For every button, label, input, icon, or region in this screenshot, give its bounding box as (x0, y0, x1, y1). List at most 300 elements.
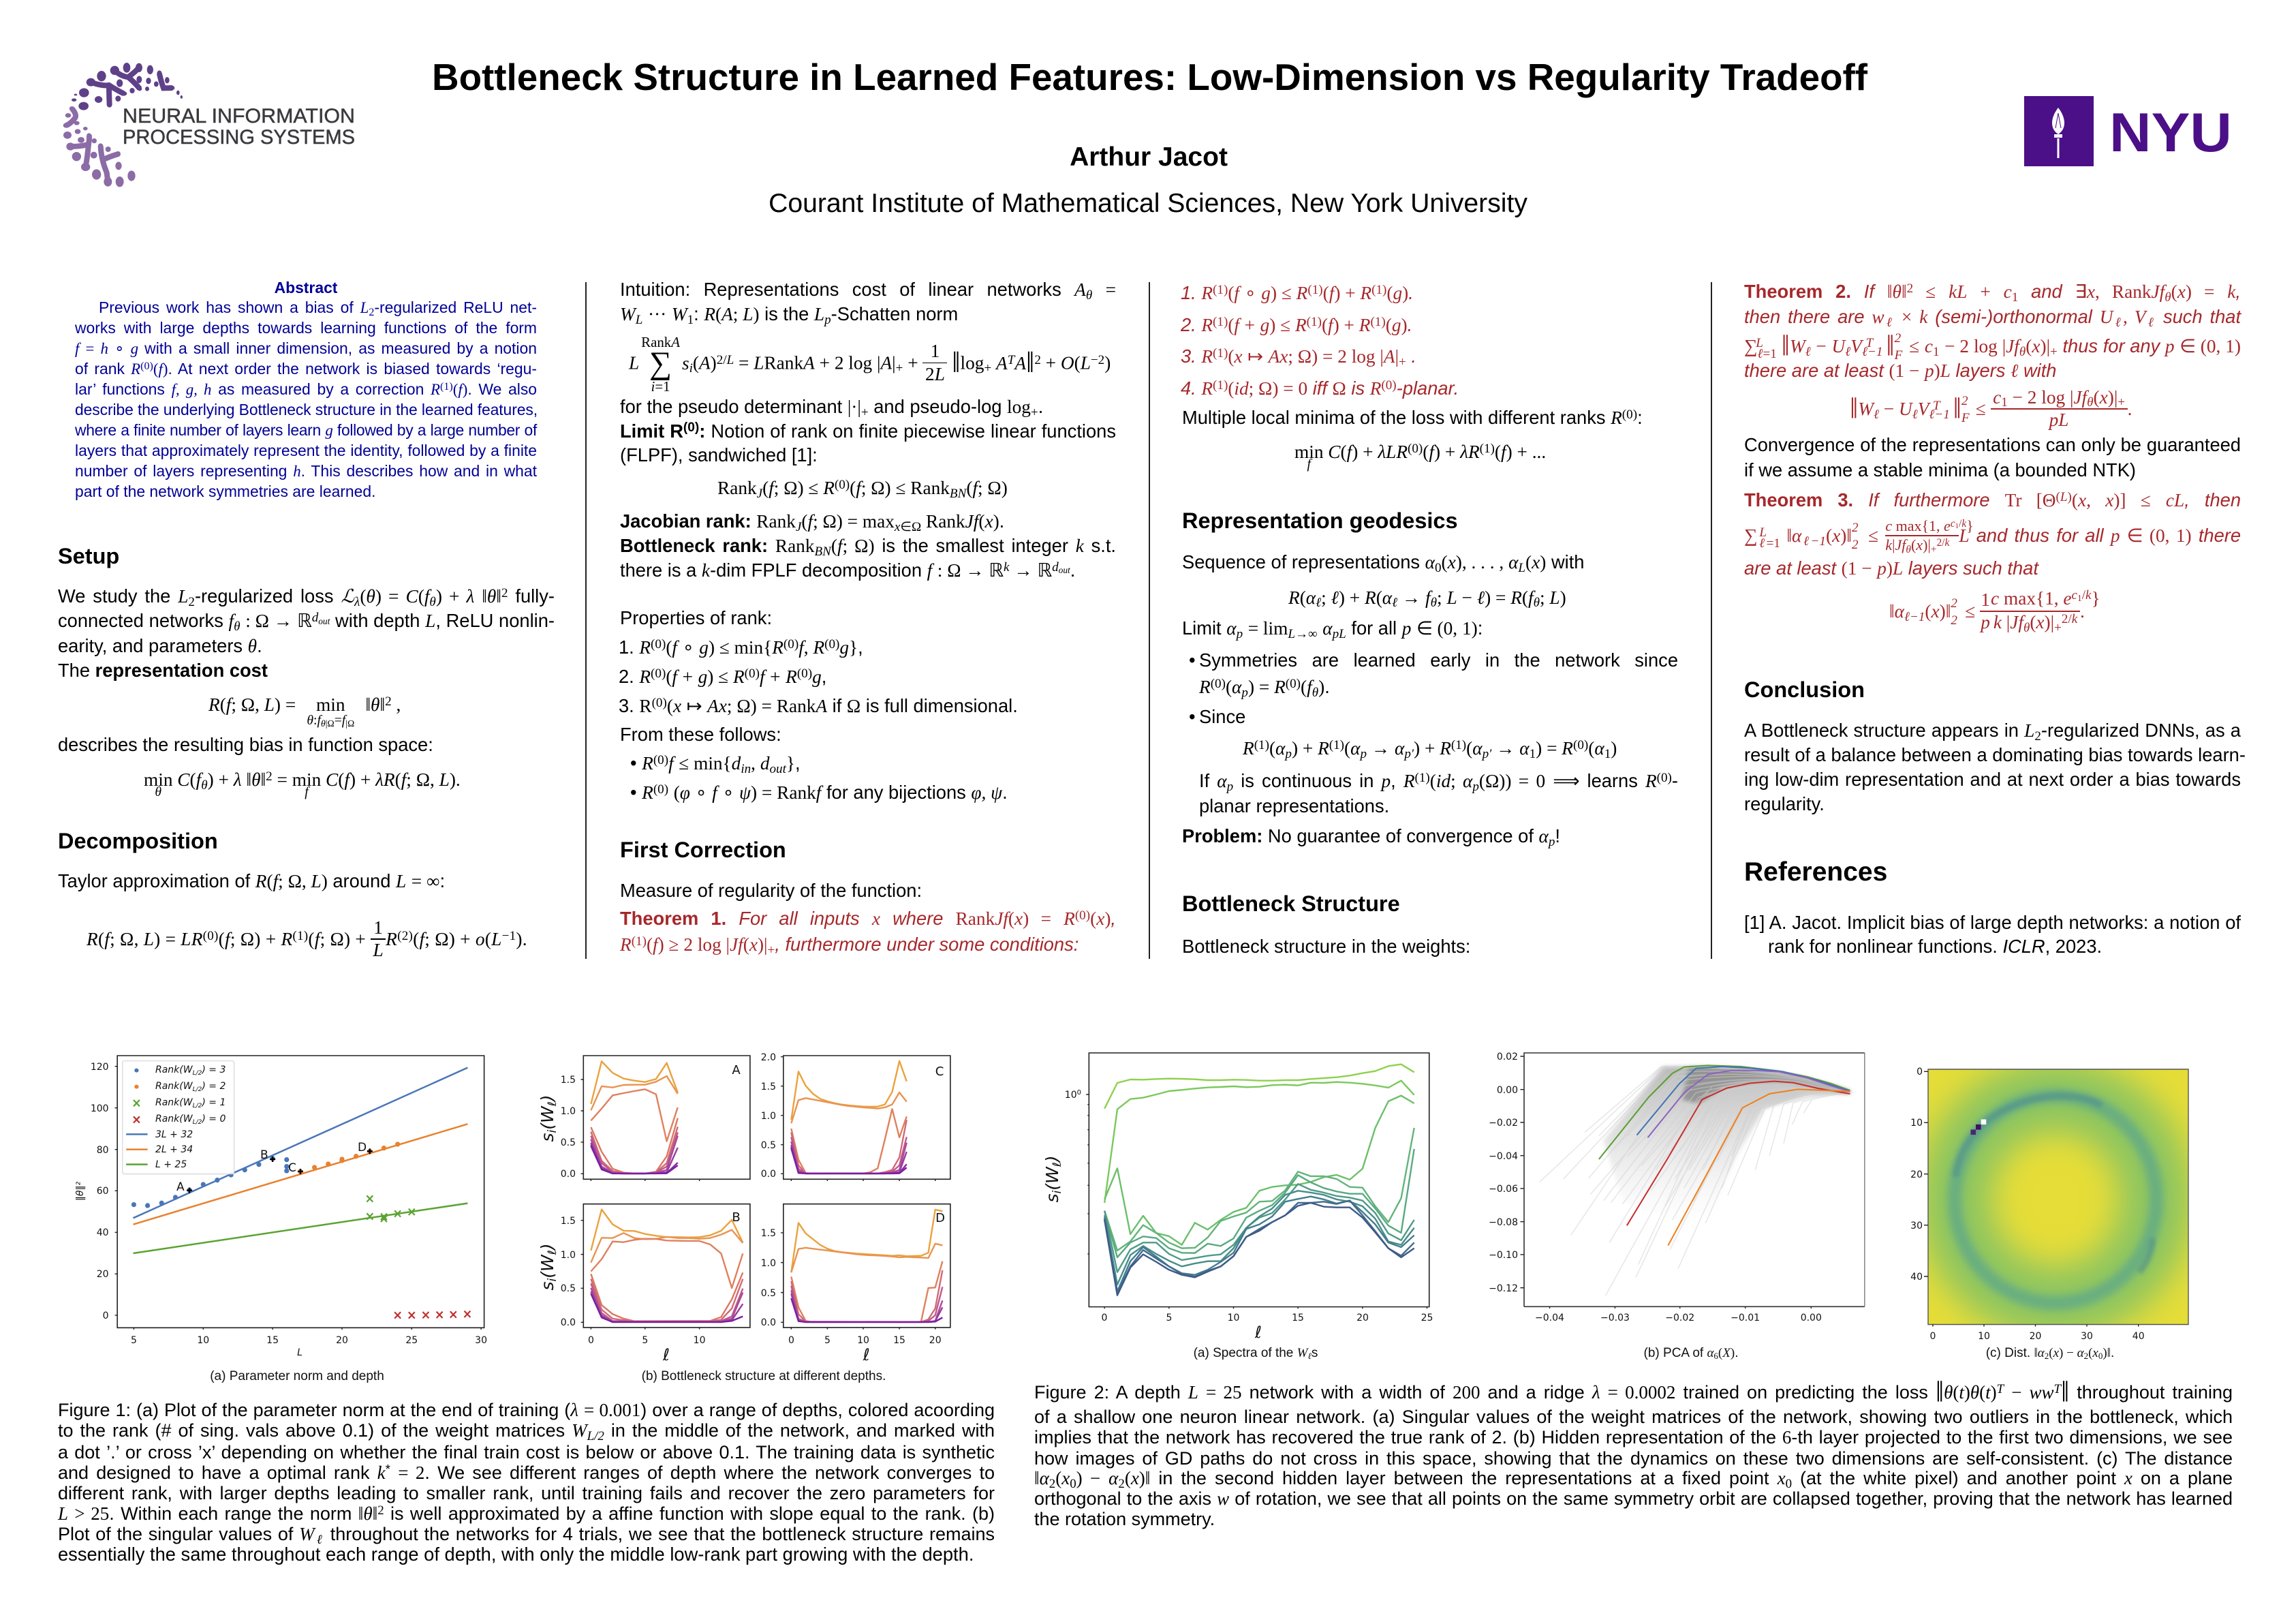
equation: geodesic: R(αℓ; ℓ) + R(αℓ → fθ; L − ℓ) = R(fθ; L) (1288, 587, 1566, 610)
chart: parameter norm vs depth: 10 (197, 1335, 209, 1346)
chart: parameter norm vs depth: (a) Parameter norm and depth (210, 1369, 384, 1383)
chart: bottleneck structure, panels A B C D: 15 (893, 1335, 905, 1346)
chart: parameter norm vs depth: 2L + 34 (155, 1144, 193, 1155)
caption: figure 2: Figure 2: A depth L = 25 network with a width of 200 and a ridge λ = 0.0002 trained on predicting the loss ‖θ(t)θ(t)T − wwT‖ throughout training (1034, 1376, 2233, 1408)
chart: PCA of hidden representation: (b) PCA of α (1644, 1346, 1713, 1360)
chart: spectra of the weight matrices: 20 (1356, 1313, 1369, 1323)
chart: parameter norm vs depth: D (358, 1141, 367, 1154)
chart: parameter norm vs depth: 20 (336, 1335, 348, 1346)
equation: function space bias: f (305, 784, 309, 799)
equation: function space bias: C(fθ) + λ ‖θ‖2 = C(f) + λR(f; Ω, L). (177, 769, 461, 793)
text: setup: We study the L2-regularized loss ℒλ(θ) = C(fθ) + λ ‖θ‖2 fully- (58, 585, 555, 609)
text: intuition: WL ··· W1: R(A; L) is the Lp-Schatten norm (620, 303, 958, 327)
equation: objective expansion: min (1294, 442, 1323, 462)
text: limit: Limit αp = limL→∞ αpL for all p ∈ (0, 1): (1182, 617, 1483, 641)
text: rank definitions (620, 510, 1116, 581)
abstract (75, 279, 538, 500)
caption: figure 2: implies that the network has recovered the true rank of 2. (b) Hidden representation of the 6-th layer projected to the first two dimensions, we see (1034, 1427, 2233, 1447)
text: continuity (1199, 769, 1678, 819)
chart: spectra of the weight matrices: 10 (1065, 1090, 1077, 1101)
text: conclusion: ing low-dim representation and at next order a bias towards (1744, 769, 2241, 790)
chart: bottleneck structure, panels A B C D: 1.0 (561, 1250, 576, 1261)
chart: distance heatmap: . (2111, 1346, 2114, 1360)
list: rank properties: 3. R(0)(x ↦ Ax; Ω) = RankA if Ω is full dimensional. (619, 695, 1018, 716)
panel: column 3 (1180, 282, 1678, 957)
chart: parameter norm vs depth: C (288, 1161, 296, 1175)
theorem 2: there are at least (1 − p)L layers ℓ with (1744, 360, 2056, 381)
panel: column 4 (1744, 271, 2241, 961)
text: problem: Problem: No guarantee of convergence of αp! (1182, 825, 1560, 849)
chart: distance heatmap: 30 (2081, 1331, 2093, 1342)
logo: NeurIPS: NEURAL INFORMATION (123, 105, 355, 127)
text: limit R0 (620, 396, 1116, 465)
caption: figure 1: essentially the same throughout each range of depth, with only the middle low-rank part growing with the depth. (58, 1544, 974, 1565)
chart: bottleneck structure, panels A B C D: 0.5 (561, 1137, 576, 1148)
divider lines between columns (0, 0, 2296, 1022)
chart: parameter norm vs depth (75, 1056, 487, 1383)
theorem 1 conditions: 1. R(1)(f ∘ g) ≤ R(1)(f) + R(1)(g). (1181, 282, 1414, 303)
title: Bottleneck Structure in Learned Features: Low-Dimension vs Regularity Tradeoff (432, 56, 1867, 98)
equation: representation cost: R(f; Ω, L) = ‖θ‖2 , (208, 694, 401, 715)
chart: spectra of the weight matrices: (W (1042, 1166, 1062, 1191)
chart: parameter norm vs depth: L/2 (193, 1103, 202, 1109)
theorem 3: 2 (1852, 521, 1859, 535)
chart: parameter norm vs depth: ) = 2 (201, 1081, 226, 1092)
heading: Conclusion: Conclusion (1744, 677, 1865, 702)
theorem 2 (1744, 279, 2241, 384)
chart: spectra of the weight matrices: ℓ (1307, 1351, 1312, 1361)
text: sequence of representations: Sequence of representations α0(x), . . . , αL(x) with (1182, 551, 1585, 575)
chart: PCA of hidden representation: 6 (1713, 1351, 1718, 1361)
chart: bottleneck structure, panels A B C D: 0.0 (761, 1317, 776, 1328)
chart: PCA of hidden representation: −0.03 (1600, 1313, 1630, 1323)
chart: bottleneck structure, panels A B C D: D (935, 1211, 945, 1225)
chart: spectra of the weight matrices: ℓ (1051, 1162, 1064, 1167)
chart: bottleneck structure, panels A B C D: 10 (857, 1335, 869, 1346)
text: setup: earity, and parameters θ. (58, 635, 262, 656)
panel B (591, 1210, 743, 1322)
chart: bottleneck structure, panels A B C D: 0.5 (561, 1283, 576, 1294)
chart: parameter norm vs depth: 20 (97, 1269, 109, 1280)
theorem 3: Theorem 3. If furthermore Tr [Θ(L)(x, x)] ≤ cL, then (1744, 489, 2241, 510)
chart: PCA of hidden representation: ( (1718, 1346, 1722, 1360)
chart: bottleneck structure, panels A B C D: 1.0 (761, 1258, 776, 1269)
theorem 3: ∑ℓ=1L ‖αℓ−1(x)‖ ≤ L and thus for all p ∈ (0, 1) there (1744, 525, 2241, 551)
equation: objective expansion: f (1307, 457, 1311, 472)
chart: PCA of hidden representation: −0.06 (1489, 1184, 1518, 1195)
text: intuition (620, 279, 1116, 327)
list: symmetries bullet: R(0)(αp) = R(0)(fθ). (1199, 676, 1330, 700)
list: since bullet: Since (1199, 706, 1245, 727)
list: consequences: • R(0) (φ ∘ f ∘ ψ) = Rankf for any bijections φ, ψ. (630, 782, 1008, 803)
chart: parameter norm vs depth: 0 (103, 1311, 109, 1321)
figure panels (76, 1052, 2189, 1383)
text: convergence (1744, 433, 2241, 482)
equation: representation cost: min (316, 694, 345, 715)
chart: distance heatmap: 20 (1910, 1169, 1923, 1180)
chart: PCA of hidden representation: −0.02 (1665, 1313, 1694, 1323)
heading: Decomposition: Decomposition (58, 829, 218, 853)
equation: function space bias: min (292, 769, 321, 790)
chart: distance heatmap: x) − α (2053, 1346, 2084, 1360)
chart: PCA of hidden representation: −0.01 (1731, 1313, 1760, 1323)
chart: parameter norm vs depth: 5 (131, 1335, 137, 1346)
caption: figure 1: to the rank (# of sing. vals above 0.1) of the weight matrices WL/2 in the middle of the network, and marked with (58, 1420, 995, 1443)
chart: bottleneck structure, panels A B C D: ℓ (546, 1250, 559, 1255)
theorem 2: 2 (1895, 331, 1901, 346)
equation: rank sum: R(1)(αp) + R(1)(αp → αp′) + R(1)(αp′ → α1) = R(0)(α1) (1243, 738, 1617, 761)
text: continuity: planar representations. (1199, 795, 1389, 816)
theorem 1 conditions: 4. R(1)(id; Ω) = 0 iff Ω is R(0)-planar. (1181, 378, 1459, 399)
panel: column 3: • (1189, 706, 1196, 727)
caption: figure 1: and designed to have a optimal rank k* = 2. We see different ranges of depth where the network converges to (58, 1462, 995, 1483)
heading: First Correction: First Correction (620, 838, 786, 862)
text: intuition: Intuition: Representations cost of linear networks Aθ = (620, 279, 1116, 303)
equation: representation bound: 2 (1951, 613, 1957, 628)
caption: figure 2: ‖α2(x0) − α2(x)‖ in the second hidden layer between the representations at a fixed point x0 (at the white pixel) and another point x on a plane (1034, 1468, 2233, 1491)
text: bottleneck in weights: Bottleneck structure in the weights: (1182, 936, 1470, 957)
text: conclusion: result of a balance between a dominating bias towards learn- (1744, 744, 2246, 765)
chart: bottleneck structure, panels A B C D: A (732, 1063, 741, 1077)
chart: PCA of hidden representation: −0.04 (1535, 1313, 1564, 1323)
author: Arthur Jacot (1070, 142, 1228, 172)
abstract: number of layers representing h. This describes how and in what (75, 462, 537, 480)
caption: figure 1: L > 25. Within each range the norm ‖θ‖2 is well approximated by a affine function with slope equal to the rank. (b) (58, 1503, 995, 1524)
panel: column 1: θ:fθ|Ω=f|Ω (307, 713, 354, 729)
chart: bottleneck structure, panels A B C D: 20 (929, 1335, 942, 1346)
theorem 1: R(1)(f) ≥ 2 log |Jf(x)|+, furthermore under some conditions: (620, 934, 1079, 957)
chart: PCA of hidden representation: X). (1722, 1346, 1738, 1360)
abstract: Abstract (275, 279, 337, 296)
text: conclusion: A Bottleneck structure appears in L2-regularized DNNs, as a (1744, 720, 2241, 744)
chart: bottleneck structure, panels A B C D: 1.5 (761, 1082, 776, 1092)
panel: column 2 (619, 279, 1116, 957)
chart: distance heatmap: 30 (1910, 1221, 1923, 1231)
panel C (791, 1061, 907, 1174)
chart: spectra of the weight matrices: s (1042, 1193, 1062, 1203)
equation: weight bound: pL (2049, 410, 2068, 430)
panel D (791, 1210, 942, 1322)
chart: spectra of the weight matrices: 10 (1228, 1313, 1239, 1323)
chart: bottleneck structure, panels A B C D: 5 (642, 1335, 648, 1346)
abstract: works with large depths towards learning functions of the form (75, 319, 537, 337)
chart: PCA of hidden representation: 0.00 (1801, 1313, 1822, 1323)
chart: distance heatmap: ( (2049, 1346, 2053, 1360)
equation: Schatten expansion: 1 (931, 341, 940, 361)
chart: parameter norm vs depth: L/2 (193, 1086, 202, 1093)
chart: parameter norm vs depth: 80 (97, 1145, 109, 1156)
text: limit R0: Limit R(0): Notion of rank on finite piecewise linear functions (620, 420, 1116, 442)
chart: bottleneck structure, panels A B C D: 0 (588, 1335, 594, 1346)
theorem 1 conditions: 3. R(1)(x ↦ Ax; Ω) = 2 log |A|+ . (1181, 346, 1416, 369)
text: setup (58, 585, 555, 681)
chart: parameter norm vs depth: 25 (405, 1335, 418, 1346)
chart: bottleneck structure, panels A B C D: ) (538, 1243, 557, 1251)
caption: figure 2: orthogonal to the axis w of rotation, we see that all points on the same symmetry orbit are collapsed together, proving that the network has learned (1034, 1488, 2233, 1509)
chart: parameter norm vs depth: 120 (91, 1062, 109, 1073)
theorem 1 conditions: 2. R(1)(f + g) ≤ R(1)(f) + R(1)(g). (1181, 314, 1412, 335)
abstract: layers that approximately represent the identity, followed by a finite (75, 442, 537, 459)
chart: bottleneck structure, panels A B C D: ℓ (662, 1345, 670, 1364)
list: rank properties: 2. R(0)(f + g) ≤ R(0)f + R(0)g, (619, 666, 826, 687)
equation: representation bound: 1 (1981, 589, 1990, 610)
list: rank properties (619, 637, 1018, 716)
list: rank properties: 1. R(0)(f ∘ g) ≤ min{R(0)f, R(0)g}, (619, 637, 863, 658)
text: convergence: Convergence of the representations can only be guaranteed (1744, 434, 2241, 455)
chart: PCA of hidden representation: −0.02 (1489, 1118, 1518, 1129)
caption: figure 2 (1034, 1382, 2233, 1527)
chart: distance heatmap: 20 (2030, 1331, 2041, 1342)
text: Taylor: Taylor approximation of R(f; Ω, L) around L = ∞: (58, 870, 445, 891)
equation: representation cost (208, 694, 401, 729)
panel A (591, 1061, 678, 1174)
chart: spectra of the weight matrices: 0 (1077, 1089, 1081, 1097)
caption: figure 1: Figure 1: (a) Plot of the parameter norm at the end of training (λ = 0.001) over a range of depths, colored acoording (58, 1400, 995, 1420)
list: since bullet (1199, 705, 1403, 729)
caption: figure 1: different rank, with larger depths leading to smaller rank, until training fails and recover the zero parameters for (58, 1483, 995, 1503)
panel: column 1 (58, 279, 555, 960)
chart: bottleneck structure, panels A B C D: 0.5 (761, 1140, 776, 1151)
heading: References: References (1744, 857, 1887, 887)
equation: representation bound: c max{1, ec1/k} (1991, 588, 2100, 609)
theorem 3 (1744, 488, 2241, 582)
text: limit R0: for the pseudo determinant |·|+ and pseudo-log log+. (620, 396, 1043, 420)
chart: parameter norm vs depth: L/2 (193, 1119, 202, 1126)
chart: bottleneck structure, panels A B C D: 0.5 (761, 1288, 776, 1299)
chart: bottleneck structure, panels A B C D: i (546, 1278, 559, 1281)
equation: weight bound: F (1961, 411, 1970, 425)
equation: function space bias: θ (155, 784, 161, 799)
chart: PCA of hidden representation: −0.04 (1489, 1151, 1518, 1162)
chart: distance heatmap: 0 (2098, 1351, 2103, 1361)
theorem 2: Theorem 2. If ‖θ‖2 ≤ kL + c1 and ∃x, RankJfθ(x) = k, (1744, 281, 2241, 305)
chart: bottleneck structure, panels A B C D (538, 1052, 950, 1383)
chart: distance heatmap: 0 (1930, 1331, 1936, 1342)
chart: parameter norm vs depth: 60 (97, 1186, 109, 1197)
chart: bottleneck structure, panels A B C D: C (935, 1064, 944, 1079)
abstract: Previous work has shown a bias of L2-regularized ReLU net- (99, 298, 537, 318)
chart: parameter norm vs depth: Rank(W (155, 1114, 193, 1124)
chart: bottleneck structure, panels A B C D: s (538, 1133, 557, 1142)
chart: parameter norm vs depth: A (176, 1180, 185, 1194)
logo: NeurIPS: PROCESSING SYSTEMS (123, 126, 355, 149)
chart: parameter norm vs depth: 3L + 32 (155, 1129, 193, 1140)
text: reference 1 (1744, 910, 2241, 959)
abstract: where a finite number of layers learn g followed by a large number of (75, 421, 537, 439)
equation: representation bound: p (1981, 612, 1990, 632)
chart: distance heatmap: 0 (1917, 1067, 1923, 1077)
text: conclusion: regularity. (1744, 793, 1825, 814)
chart: parameter norm vs depth: L (297, 1347, 302, 1358)
equation: representation bound: 2 (1951, 596, 1957, 611)
panel: column 2: RankA (641, 334, 680, 350)
caption: figure 2: the rotation symmetry. (1034, 1509, 1215, 1529)
abstract: lar’ functions f, g, h as measured by a correction R(1)(f). We also (75, 380, 537, 398)
chart: bottleneck structure, panels A B C D: ℓ (546, 1101, 559, 1107)
chart: bottleneck structure, panels A B C D: (b) Bottleneck structure at different depths. (642, 1369, 886, 1383)
theorem 2: then there are wℓ × k (semi-)orthonormal Uℓ, Vℓ such that (1744, 306, 2241, 330)
chart: distance heatmap: (c) Dist. ‖α (1986, 1346, 2045, 1360)
chart: parameter norm vs depth: ‖θ‖² (75, 1182, 86, 1201)
chart: spectra of the weight matrices: 0 (1102, 1313, 1107, 1323)
chart: bottleneck structure, panels A B C D: 0 (788, 1335, 794, 1346)
text: reference 1: [1] A. Jacot. Implicit bias of large depth networks: a notion of (1744, 912, 2241, 933)
chart: bottleneck structure, panels A B C D: 1.5 (561, 1216, 576, 1227)
list: symmetries bullet (1199, 648, 1678, 701)
chart: parameter norm vs depth: 30 (475, 1335, 487, 1346)
text: measure of regularity: Measure of regularity of the function: (620, 880, 922, 901)
equation: Taylor expansion: R(f; Ω, L) = LR(0)(f; Ω) + R(1)(f; Ω) + R(2)(f; Ω) + o(L−1). (87, 929, 527, 949)
theorem 1: Theorem 1. For all inputs x where RankJf(x) = R(0)(x), (620, 908, 1116, 929)
chart: distance heatmap (1910, 1067, 2188, 1361)
chart: distance heatmap: )‖ (2103, 1346, 2111, 1360)
chart: PCA of hidden representation: 0.02 (1497, 1052, 1518, 1062)
text: rank definitions: Jacobian rank: RankJ(f; Ω) = maxx∈Ω RankJf(x). (620, 510, 1004, 534)
chart: bottleneck structure, panels A B C D: s (538, 1281, 557, 1291)
chart: spectra of the weight matrices: ) (1042, 1155, 1062, 1163)
chart: PCA of hidden representation: −0.08 (1489, 1217, 1518, 1228)
panel: column 3: • (1189, 649, 1196, 671)
chart: distance heatmap: 10 (1978, 1331, 1990, 1342)
chart: bottleneck structure, panels A B C D: ) (538, 1094, 557, 1103)
theorem 2: F (1895, 348, 1902, 363)
chart: spectra of the weight matrices: s (1312, 1346, 1318, 1360)
chart: bottleneck structure, panels A B C D: 0.0 (561, 1317, 576, 1328)
equation: rank sandwich: RankJ(f; Ω) ≤ R(0)(f; Ω) ≤ RankBN(f; Ω) (717, 478, 1008, 501)
chart: bottleneck structure, panels A B C D: 1.5 (761, 1228, 776, 1239)
chart: distance heatmap: 40 (2132, 1331, 2145, 1342)
text: rank definitions: Bottleneck rank: RankBN(f; Ω) is the smallest integer k s.t. (620, 535, 1116, 559)
chart: parameter norm vs depth: L/2 (193, 1070, 202, 1077)
equation: function space bias (144, 769, 461, 799)
panel: column 2: i=1 (651, 378, 670, 395)
chart: bottleneck structure, panels A B C D: i (546, 1129, 559, 1133)
equation: Schatten expansion (628, 334, 1111, 395)
heading: Representation geodesics: Representation geodesics (1182, 508, 1458, 533)
text: limit R0: (FLPF), sandwiched [1]: (620, 444, 818, 465)
chart: parameter norm vs depth: 15 (266, 1335, 279, 1346)
chart: parameter norm vs depth: B (260, 1148, 268, 1162)
text: describes: describes the resulting bias in function space: (58, 734, 433, 755)
chart: parameter norm vs depth: ) = 1 (201, 1097, 226, 1108)
chart: spectra of the weight matrices: 15 (1292, 1313, 1304, 1323)
theorem 3: are at least (1 − p)L layers such that (1744, 557, 2038, 579)
equation: weight bound: c1 − 2 log |Jfθ(x)|+ (1993, 387, 2125, 410)
equation: Schatten expansion: ∑ (649, 346, 672, 381)
chart: bottleneck structure, panels A B C D: 0.0 (561, 1169, 576, 1180)
chart: PCA of hidden representation: −0.12 (1489, 1283, 1518, 1294)
chart: bottleneck structure, panels A B C D: (W (538, 1105, 557, 1130)
chart: parameter norm vs depth: ) = 0 (201, 1114, 226, 1124)
chart: bottleneck structure, panels A B C D: 10 (694, 1335, 706, 1346)
chart: distance heatmap: 2 (2084, 1351, 2088, 1361)
caption: figure 1: a dot ’.’ or cross ’x’ depending on whether the final train cost is below or above 0.1. The training data is synthetic (58, 1442, 995, 1462)
chart: parameter norm vs depth: 40 (97, 1227, 109, 1238)
logo: NYU (2024, 96, 2232, 166)
equation: Schatten expansion: 2L (925, 364, 945, 384)
equation: representation bound: ‖αℓ−1(x)‖ ≤ . (1889, 601, 2085, 624)
theorem 3: 2 (1852, 538, 1859, 552)
chart: bottleneck structure, panels A B C D: 5 (824, 1335, 831, 1346)
caption: figure 1: Plot of the singular values of Wℓ throughout the networks for 4 trials, we see that the bottleneck structure remains (58, 1524, 995, 1547)
logo: NeurIPS (63, 63, 355, 187)
text: multiple local minima: Multiple local minima of the loss with different ranks R(0): (1182, 407, 1643, 428)
equation: weight bound: ‖Wℓ − UℓVℓ−1T ‖ ≤ . (1850, 392, 2132, 425)
text: setup: connected networks fθ : Ω → ℝdout with depth L, ReLU nonlin- (58, 610, 555, 634)
chart: bottleneck structure, panels A B C D: 1.0 (561, 1106, 576, 1117)
text: from these follows: From these follows: (620, 724, 781, 745)
theorem 1 conditions (1181, 281, 1679, 408)
heading: Setup: Setup (58, 544, 119, 568)
chart: spectra of the weight matrices: (a) Spectra of the W (1194, 1346, 1307, 1360)
chart: PCA of hidden representation: −0.10 (1489, 1250, 1518, 1261)
chart: bottleneck structure, panels A B C D: 1.0 (761, 1111, 776, 1122)
equation: Taylor expansion (86, 917, 527, 960)
list: consequences (630, 752, 1008, 803)
equation: weight bound: 2 (1961, 394, 1968, 408)
theorem 3: c max{1, ec1/k} (1885, 517, 1974, 534)
chart: PCA of hidden representation (1489, 1052, 1865, 1361)
chart: parameter norm vs depth: Rank(W (155, 1081, 193, 1092)
chart: spectra of the weight matrices: 5 (1166, 1313, 1172, 1323)
chart: parameter norm vs depth: 100 (91, 1103, 109, 1114)
chart: parameter norm vs depth: ) = 3 (201, 1064, 226, 1075)
chart: bottleneck structure, panels A B C D: B (732, 1210, 741, 1225)
heading: Bottleneck Structure: Bottleneck Structure (1182, 891, 1400, 916)
abstract: f = h ∘ g with a small inner dimension, as measured by a notion (75, 339, 537, 357)
chart: PCA of hidden representation: 0.00 (1497, 1085, 1518, 1096)
abstract: describe the underlying Bottleneck structure in the learned features, (75, 401, 538, 418)
chart: distance heatmap: ( (2088, 1346, 2092, 1360)
text: reference 1: rank for nonlinear functions. ICLR, 2023. (1768, 936, 2102, 957)
chart: bottleneck structure, panels A B C D: (W (538, 1254, 557, 1278)
caption: figure 2: of a shallow one neuron linear network. (a) Singular values of the weight matrices of the network, showing two outliers in the bottleneck, which (1034, 1407, 2233, 1427)
chart: parameter norm vs depth: Rank(W (155, 1097, 193, 1108)
abstract: of rank R(0)(f). At next order the network is biased towards ‘regu- (75, 360, 537, 378)
theorem 2: ∑ℓ=1L ‖Wℓ − UℓVℓ−1T ‖ ≤ c1 − 2 log |Jfθ(x)|+ thus for any p ∈ (0, 1) (1744, 329, 2241, 362)
text: properties of rank: Properties of rank: (620, 607, 772, 628)
chart: parameter norm vs depth: Rank(W (155, 1064, 193, 1075)
equation: objective expansion: C(f) + λLR(0)(f) + λR(1)(f) + ... (1328, 442, 1546, 462)
equation: Taylor expansion: L (373, 940, 384, 960)
chart: spectra of the weight matrices: i (1051, 1190, 1064, 1193)
list: consequences: • R(0)f ≤ min{din, dout}, (630, 752, 801, 776)
equation: function space bias: min (144, 769, 172, 790)
caption: figure 2: how images of GD paths do not cross in this space, showing that the dynamics on these two dimensions are self-consistent. (c) The distance (1034, 1448, 2233, 1469)
equation: representation bound: k |Jfθ(x)|+2/k (1994, 612, 2077, 635)
chart: bottleneck structure, panels A B C D: 2.0 (761, 1052, 776, 1063)
chart: distance heatmap: 40 (1910, 1272, 1923, 1283)
text: conclusion (1744, 718, 2241, 816)
text: continuity: If αp is continuous in p, R(1)(id; αp(Ω)) = 0 ⟹ learns R(0)- (1199, 770, 1678, 794)
equation: Taylor expansion: 1 (373, 917, 383, 938)
equation: Schatten expansion: L si(A)2/L = LRankA + 2 log |A|+ + ‖log+ ATA‖2 + O(L−2) (629, 346, 1111, 379)
text: setup: The representation cost (58, 660, 268, 681)
theorem 1 (620, 908, 1116, 957)
chart: bottleneck structure, panels A B C D: 0.0 (761, 1169, 776, 1180)
chart: bottleneck structure, panels A B C D: ℓ (863, 1345, 870, 1364)
text: rank definitions: there is a k-dim FPLF decomposition f : Ω → ℝk → ℝdout. (620, 560, 1075, 581)
text: convergence: if we assume a stable minima (a bounded NTK) (1744, 459, 2136, 480)
chart: parameter norm vs depth: L + 25 (155, 1159, 187, 1170)
chart: distance heatmap: x (2092, 1346, 2098, 1360)
list: symmetries bullet: Symmetries are learned early in the network since (1199, 649, 1678, 671)
affiliation: Courant Institute of Mathematical Sciences, New York University (769, 189, 1527, 218)
chart: spectra of the weight matrices: ℓ (1254, 1323, 1262, 1342)
chart: spectra of the weight matrices (1042, 1053, 1433, 1361)
theorem 3: k|Jfθ(x)|+2/k (1885, 536, 1949, 555)
logo: NYU: NYU (2109, 102, 2232, 164)
